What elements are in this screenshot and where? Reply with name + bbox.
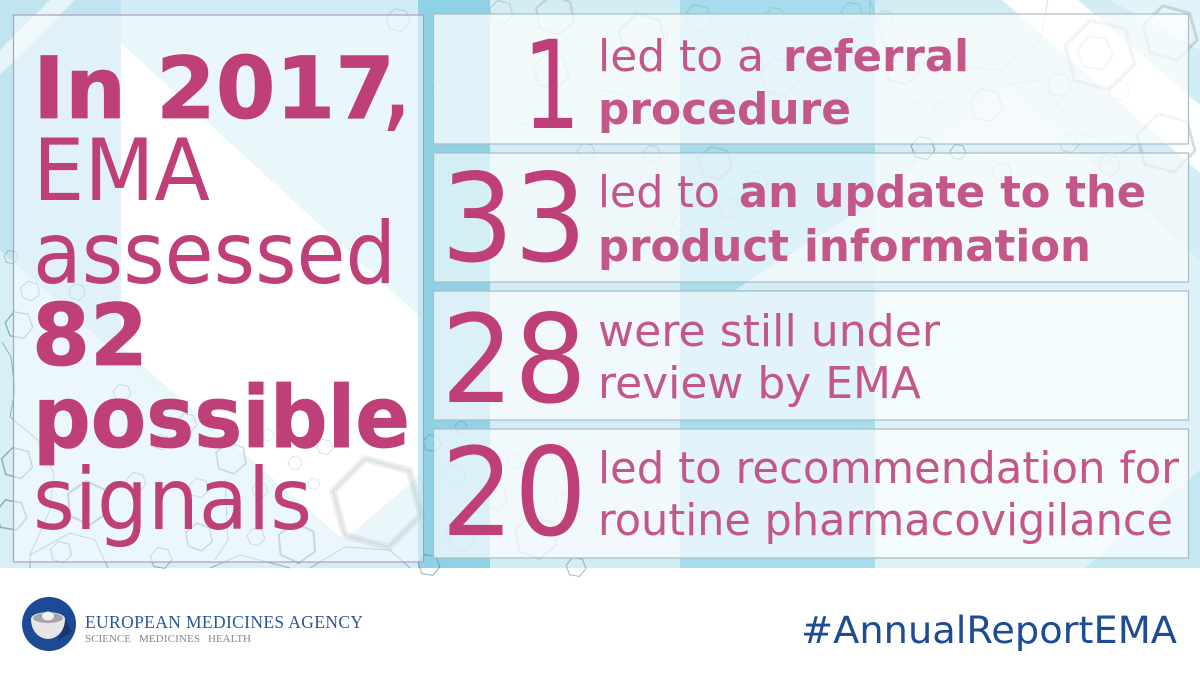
stat: 28 were still under review by EMA [441,289,941,431]
hashtag: #AnnualReportEMA [801,609,1177,652]
agency name and strapline: HEALTH [208,633,251,645]
heading: In 2017, EMA assessed 82 possible signals: EMA [33,121,210,221]
heading: In 2017, EMA assessed 82 possible signals: assessed [33,204,396,304]
stat: 1 led to a referral procedure: 1 [523,15,581,157]
panel: left summary [14,15,424,562]
stat: 20 led to recommendation for routine pharmacovigilance [441,422,1180,564]
stat: 33 led to an update to the product information [441,148,1146,290]
heading: In 2017, EMA assessed 82 possible signals: In 2017 [33,39,395,139]
heading: In 2017, EMA assessed 82 possible signals: , [379,16,414,144]
stat: 33 led to an update to the product information: product information [598,221,1091,272]
stat: 28 were still under review by EMA: review by EMA [598,358,921,409]
stat: 1 led to a referral procedure: led to a [598,31,764,82]
stat: 20 led to recommendation for routine pharmacovigilance: 20 [441,422,587,564]
stat: 33 led to an update to the product information: 33 [441,148,587,290]
heading: In 2017, EMA assessed 82 possible signals: signals [33,450,312,550]
panel: product information row [434,153,1188,282]
stat: 1 led to a referral procedure [523,15,969,157]
panel: routine pharmacovigilance row [434,429,1188,558]
stat: 1 led to a referral procedure: procedure [598,84,851,135]
stat: 20 led to recommendation for routine pharmacovigilance: led to recommendation for [598,443,1180,494]
panel: under review row [434,291,1188,420]
stat: 33 led to an update to the product information: led to [598,167,720,218]
panel: referral row [434,14,1188,144]
agency name and strapline [85,612,363,645]
stat: 28 were still under review by EMA: were still under [598,306,941,357]
agency name and strapline: EUROPEAN MEDICINES AGENCY [85,612,363,632]
icon: European Medicines Agency logo mark [22,597,76,651]
stat: 28 were still under review by EMA: 28 [441,289,587,431]
agency name and strapline: MEDICINES [139,633,200,645]
agency name and strapline: SCIENCE [85,633,131,645]
stat: 33 led to an update to the product information: an update to the [739,167,1146,218]
stat: 1 led to a referral procedure: referral [783,31,969,82]
heading: In 2017, EMA assessed 82 possible signals: possible [33,368,410,468]
heading: In 2017, EMA assessed 82 possible signals [32,16,414,550]
heading: In 2017, EMA assessed 82 possible signals: 82 [32,286,148,386]
stat: 20 led to recommendation for routine pharmacovigilance: routine pharmacovigilance [598,495,1173,546]
